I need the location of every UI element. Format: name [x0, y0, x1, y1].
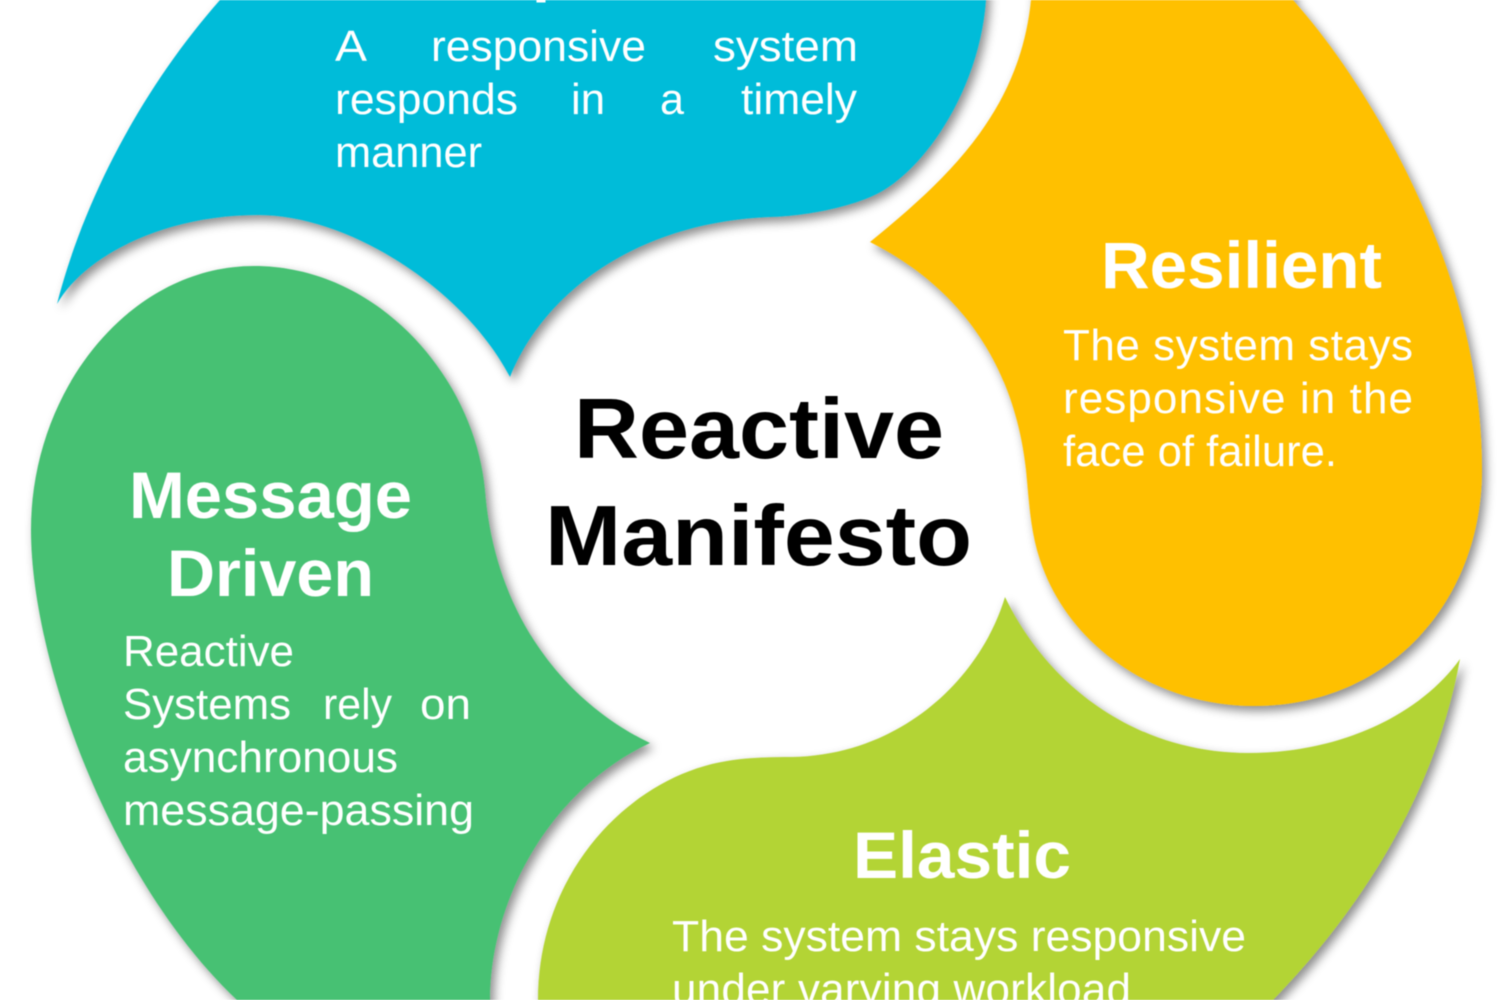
panel: Message Driven: [31, 266, 650, 1000]
text: responsive description: [335, 22, 858, 177]
heading: Elastic: Elastic: [853, 818, 1071, 892]
text: resilient description: [1063, 321, 1413, 476]
text: responsive description: responds: [335, 75, 518, 124]
text: responsive description: responsive: [431, 22, 646, 71]
title: Reactive Manifesto: [545, 382, 972, 584]
text: responsive description: in: [571, 75, 605, 124]
text: message driven description: [123, 627, 474, 835]
shape: blue petal: [57, 0, 986, 377]
panel: Responsive: [57, 0, 986, 377]
text: message driven description: Reactive: [123, 627, 294, 676]
panel: Elastic: [538, 597, 1460, 1000]
text: responsive description: A: [335, 22, 368, 71]
shape: orange petal: [870, 0, 1482, 706]
text: responsive description: a: [660, 75, 685, 124]
title: Reactive Manifesto: Reactive: [574, 382, 944, 477]
heading: Resilient: Resilient: [1101, 228, 1382, 302]
text: resilient description: The system stays: [1063, 321, 1413, 370]
text: responsive description: timely: [741, 75, 857, 124]
text: resilient description: face of failure.: [1063, 427, 1337, 476]
text: elastic description: The system stays responsive: [672, 912, 1246, 961]
shape: green petal: [31, 266, 650, 1000]
heading: Message Driven: Message: [129, 458, 412, 532]
text: message driven description: Systems: [123, 680, 291, 729]
heading: Message Driven: [129, 458, 412, 610]
text: message driven description: message-passing: [123, 786, 474, 835]
shape: lime petal: [538, 597, 1460, 1000]
text: resilient description: responsive in the: [1063, 374, 1413, 423]
text: message driven description: asynchronous: [123, 733, 398, 782]
panel: Resilient: [870, 0, 1482, 706]
title: Reactive Manifesto: Manifesto: [545, 489, 972, 584]
text: responsive description: manner: [335, 128, 482, 177]
text: elastic description: [672, 912, 1246, 1000]
heading: Message Driven: Driven: [167, 536, 374, 610]
text: responsive description: system: [713, 22, 858, 71]
text: message driven description: rely: [323, 680, 392, 729]
text: message driven description: on: [420, 680, 471, 729]
